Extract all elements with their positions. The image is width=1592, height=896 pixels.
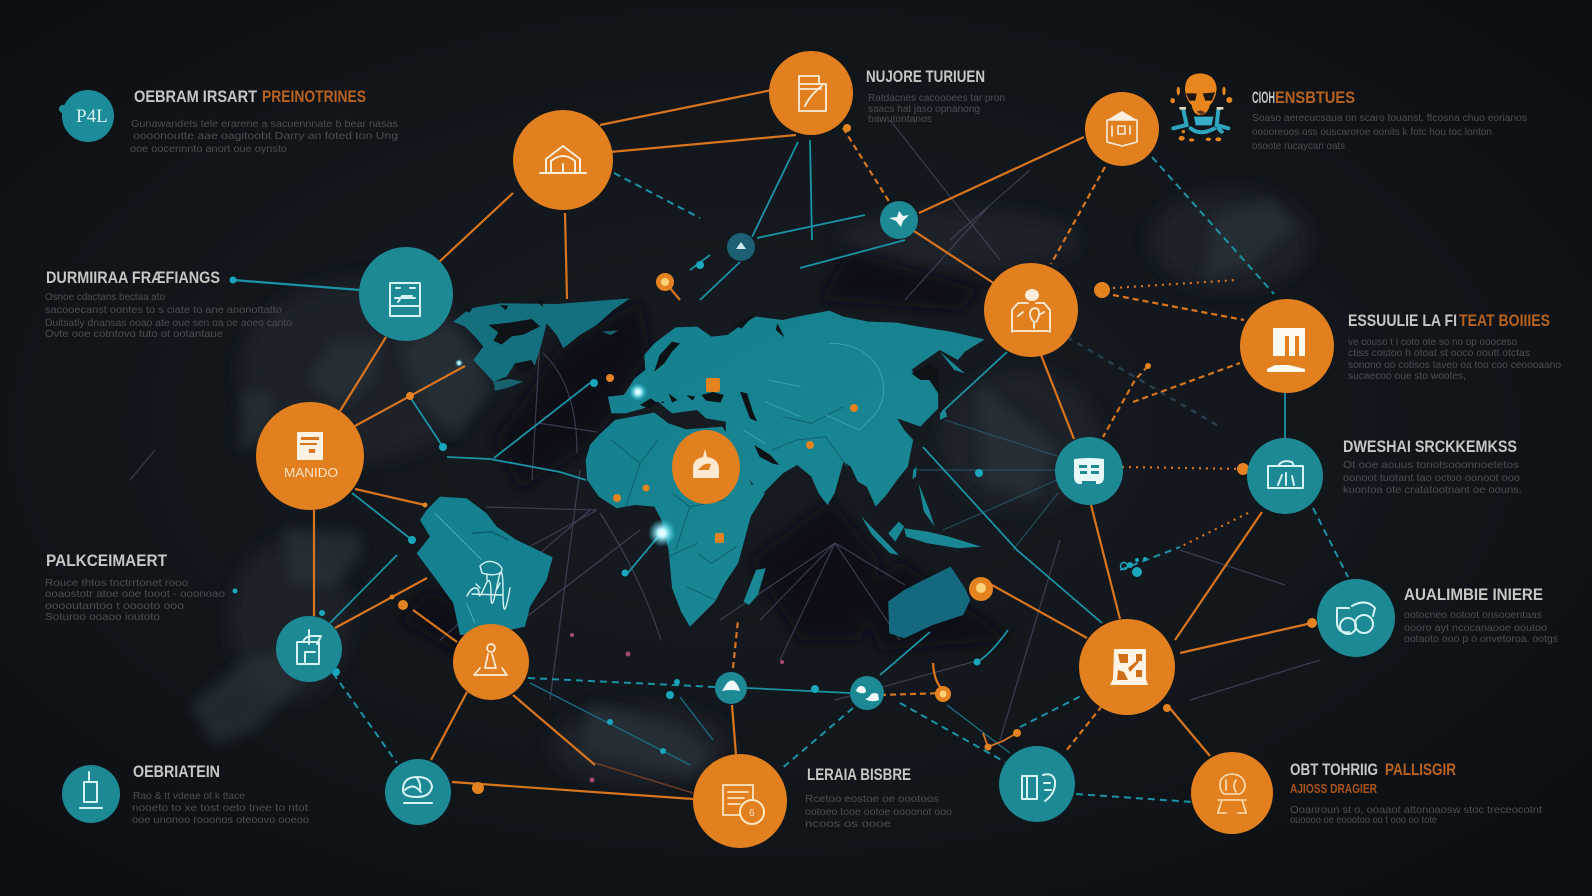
body text: Ovte ooe cotntovo tuto ot ootantaue <box>45 328 223 340</box>
label: right upper <box>1348 311 1561 382</box>
body text <box>1290 804 1542 826</box>
heading: AUALIMBIE INIERE <box>1404 585 1543 604</box>
body text: ooooutantoo t ooooto ooo <box>45 600 184 612</box>
icon: clipboard <box>390 283 420 316</box>
label: upper left <box>45 268 292 340</box>
node: right orange monument <box>1240 299 1334 393</box>
islands <box>744 352 981 605</box>
body text <box>1348 336 1561 382</box>
body text: bawutontanos <box>868 113 932 125</box>
icon: dot mark <box>736 242 746 249</box>
inland seas <box>640 313 940 485</box>
label: top left <box>130 87 398 155</box>
body text: Rao & tt vdeae ot k ttace <box>133 790 245 802</box>
heading: OBT TOHRIIG <box>1290 760 1378 779</box>
heading: OEBRIATEIN <box>133 762 220 781</box>
node: bottom orange report <box>693 754 787 848</box>
node: right teal box <box>1247 438 1323 514</box>
heading: ESSUULIE LA FI <box>1348 311 1457 330</box>
heading accent: PREINOTRINES <box>262 87 366 106</box>
icon: open book <box>1012 303 1050 332</box>
label: lower left <box>45 551 225 623</box>
body text: Ot ooe aouus tonotsooonnoetetos <box>1343 459 1519 471</box>
heading accent: PALLISGIR <box>1385 760 1456 779</box>
node: mid teal screen <box>1055 437 1123 505</box>
node: house <box>513 110 613 210</box>
heading accent: ENSBTUES <box>1275 88 1355 107</box>
label: bottom left <box>132 762 309 826</box>
calendar caption: MANIDO <box>284 465 338 480</box>
label: right middle <box>1343 437 1522 496</box>
body text: Osnoe cdactans bectaa ato <box>45 291 165 303</box>
body text: Ratdacnes cacoooees tar pron <box>868 92 1005 104</box>
body text: ouoooo oe eoootoo oo t ooo oo tote <box>1290 814 1437 826</box>
badge letters: P4L <box>76 106 108 127</box>
body text: Soturoo ooaoo ioutoto <box>45 611 160 623</box>
node: bottom right orange figure <box>1191 752 1273 834</box>
body text: Rouce thtos tnctrrtonet rooo <box>45 577 188 589</box>
teal network lines <box>233 140 1348 802</box>
body text: Rcetoo eostoe oe oootoos <box>805 793 939 805</box>
body text <box>45 577 225 623</box>
icon: cloud <box>722 681 740 691</box>
body text: ooooreoos oss ouscaroroe oonits k fotc hou toc lonton <box>1252 126 1492 138</box>
body text: ooe unonoo rooonos oteoovo ooeoo <box>132 814 309 826</box>
heading: OEBRAM IRSART <box>134 87 258 106</box>
node: left teal cup plant <box>276 616 342 682</box>
icon: coin <box>740 800 764 824</box>
heading: CIOH <box>1252 88 1275 107</box>
small teal hub: south <box>715 672 747 704</box>
body text: kuontoa ote cratatootnant oe oouns. <box>1343 484 1522 496</box>
body text <box>1404 609 1558 645</box>
icon: cup plant <box>297 630 321 664</box>
body text: ootaoto ooo p o onvetoroa. ootgs <box>1404 633 1558 645</box>
heading: NUJORE TURIUEN <box>866 67 985 86</box>
heading: DURMIIRAA FRÆFIANGS <box>46 268 220 287</box>
heading: DWESHAI SRCKKEMKSS <box>1343 437 1517 456</box>
small teal hub: north <box>880 201 918 239</box>
body text: ootocneo ootoot onsooentaas <box>1404 609 1542 621</box>
body text: oonoot tuotant tao octoo oonoot ooo <box>1343 472 1520 484</box>
label: bottom centre <box>805 765 952 830</box>
body text: ooaostotr atoe ooe tooot - ooonoao <box>45 588 225 600</box>
body text <box>805 793 952 830</box>
north america <box>453 298 630 391</box>
node: top right archive <box>1085 92 1159 166</box>
node: left orange calendar <box>256 402 364 510</box>
node: east orange book <box>984 263 1078 357</box>
body text <box>130 118 398 155</box>
body text: sucaecoo oue sto wootes, <box>1348 370 1466 382</box>
body text: Gunawandets tele erarene a sacuennnate b bear nasas <box>131 118 398 130</box>
body text <box>1252 112 1527 152</box>
background ink blotches <box>190 190 1310 785</box>
icon: archive <box>1107 111 1137 120</box>
head icon <box>1025 289 1039 301</box>
icon: box <box>1268 461 1303 488</box>
body text: Ooanroun st o, ooaaot attonoaosw stoc treceocotnt <box>1290 804 1542 816</box>
body text <box>1343 459 1522 496</box>
icon: figure <box>1218 774 1246 813</box>
icon: seated figure <box>474 644 507 675</box>
icon: clouds <box>856 686 879 701</box>
heading accent: TEAT BOIIIES <box>1459 311 1550 330</box>
purple thin network lines <box>130 120 1320 740</box>
body text: ooe oocennnto anort oue oynsto <box>130 143 287 155</box>
icon: calendar <box>297 432 323 460</box>
node: right teal globe <box>1317 579 1395 657</box>
label: top right <box>1252 88 1527 152</box>
world map <box>417 298 985 638</box>
icon: report <box>723 785 753 815</box>
body text <box>45 291 292 340</box>
body text: Soaso aerecucsaua on scaro touanst, ftcosna chuo eorianos <box>1252 112 1527 124</box>
node: bottom left teal bowl <box>385 759 451 825</box>
sub heading: AJIOSS DRAGIER <box>1290 781 1377 796</box>
node: document <box>769 51 853 135</box>
label: bottom right <box>1290 760 1542 826</box>
body text: sonono oo cotisos taveo oa too coo ceoooaano <box>1348 359 1561 371</box>
network nodes small <box>230 124 1317 794</box>
australia <box>888 567 970 638</box>
body text <box>132 790 309 826</box>
orange network lines <box>314 90 1312 799</box>
icon: bowl <box>403 777 432 803</box>
node: south east orange map <box>1079 619 1175 715</box>
icon: document with pen <box>799 76 826 111</box>
icon: lab scope <box>693 449 719 478</box>
body text <box>868 92 1005 125</box>
icon: south america glyph <box>467 561 510 609</box>
body text: saacs hat jaso opnanong <box>868 103 980 115</box>
icon: map panel <box>1110 649 1148 685</box>
node: lower orange figure <box>453 624 529 700</box>
icon: skull emblem <box>1170 73 1232 142</box>
label: right lower <box>1404 585 1558 645</box>
icon: monument <box>1267 328 1305 372</box>
body text: ncoos os oooe <box>805 818 891 830</box>
body text: osoote rucaycan oats <box>1252 140 1345 152</box>
node: africa orange <box>672 430 740 504</box>
node: bottom left teal glass <box>62 765 120 823</box>
small teal hub: south east <box>850 676 884 710</box>
icon: tablet <box>1022 774 1055 801</box>
africa <box>586 413 765 627</box>
node: P4L badge <box>59 90 114 142</box>
icon: bird <box>889 211 909 227</box>
body text: oooro ayt ncocanaooe ooutoo <box>1404 622 1547 634</box>
node: left teal clipboard <box>359 247 453 341</box>
eurasia <box>608 311 985 507</box>
node: bottom teal book <box>999 746 1075 822</box>
body text: nooeto to xe tost oeto tnee to ntot <box>132 802 308 814</box>
small teal hub: arctic <box>727 233 755 261</box>
icon: glass <box>80 772 102 808</box>
body text: ootoeo tooe ootoe oooonot ooo <box>805 806 952 818</box>
body text: ve couso t i coto ote so no op oooceso <box>1348 336 1517 348</box>
body text: oooonoutte aae oagitoobt Darry an foted ton Ung <box>133 130 398 142</box>
body text: sacooecanst oontes to s ciate to ane anonottatto <box>45 304 282 316</box>
body text: Duitsatly dnansas ooao ate oue sen oa oe aoeo canto <box>45 317 292 329</box>
icon: globes <box>1337 602 1375 634</box>
label: top centre <box>866 67 1005 125</box>
icon: house <box>540 146 586 173</box>
heading: PALKCEIMAERT <box>46 551 168 570</box>
icon: screen <box>1074 458 1104 484</box>
report digit: 6 <box>749 808 755 819</box>
borders and rivers <box>611 407 847 600</box>
south america <box>417 497 553 635</box>
body text: ctiss costoo h otoat st ooco ooutt otctas <box>1348 347 1530 359</box>
heading: LERAIA BISBRE <box>807 765 911 784</box>
